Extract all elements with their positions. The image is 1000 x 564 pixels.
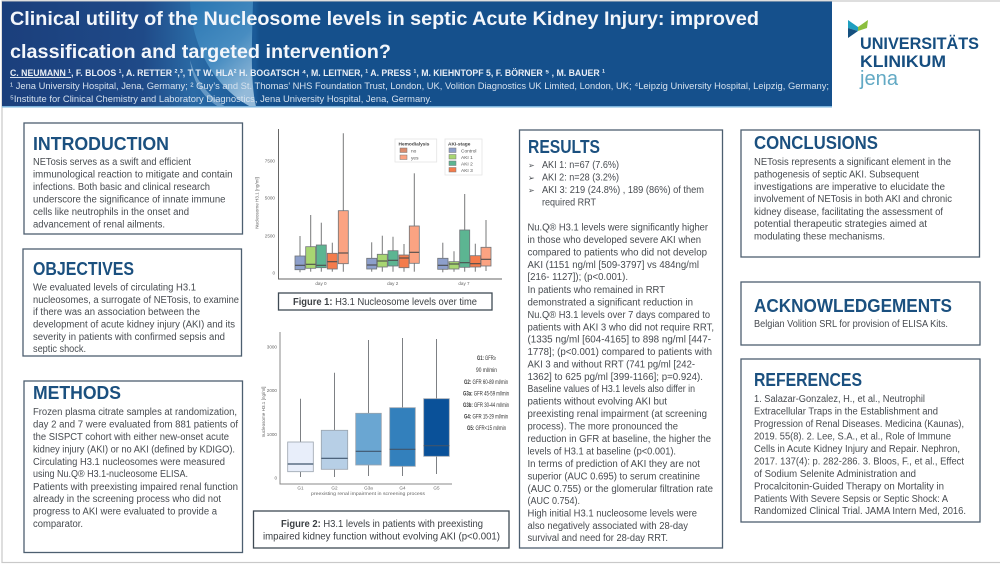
text: conclusions body: investigations are imperative to elucidate the (754, 182, 945, 193)
authors: C. NEUMANN ¹, F. BLOOS ¹, A. RETTER ²,³, T T W. HLA² H. BOGATSCH ⁴, M. LEITNER, ¹ A. PRESS ¹, M. KIEHNTOPF 5, F. BÖRNER ⁵ , M. BAUER ¹ (10, 68, 605, 78)
list: AKI counts: required RRT (542, 198, 596, 208)
legend: AKI stage: AKI 2 (461, 162, 473, 168)
legend: hemodialysis: Hemodialysis (398, 142, 430, 148)
text: objectives body: septic shock. (33, 344, 86, 355)
chart: figure 2 box plot: G5 (433, 486, 440, 490)
logo: Universitätsklinikum Jena (848, 20, 979, 90)
chart: figure 2 box plot: G4 (399, 486, 406, 490)
text: introduction body: cells like neutrophils in the onset and (33, 207, 189, 218)
text: introduction body: underscore the significance of innate immune (33, 194, 226, 206)
legend: GFR stages: G4: GFR 15-29 ml/min (464, 414, 508, 420)
legend: AKI stage (445, 139, 482, 175)
legend: GFR stages: G3a: GFR 45-59 ml/min (463, 392, 509, 398)
chart: figure 2 box plot: 2000 (267, 388, 277, 393)
list: AKI counts: ➢ (528, 186, 535, 195)
chart: figure 2 box plot: nucleosome H3.1 [ng/ml] (261, 387, 266, 437)
text: reference list: Procalcitonin-Guided Therapy on Mortality in (754, 482, 944, 492)
panel: results (520, 130, 722, 548)
chart: figure 2 box plot: 3000 (267, 344, 277, 350)
heading: conclusions: CONCLUSIONS (754, 132, 878, 153)
title (10, 8, 759, 63)
chart: figure 2 box plot: G1 (297, 486, 304, 490)
affiliations: ⁵Institute for Clinical Chemistry and Laboratory Diagnostics, Jena University Hospital, Jena, Germany. (10, 94, 432, 105)
text: objectives body (33, 282, 239, 355)
chart: figure 1 box plot (254, 129, 502, 286)
text: results body: preexisting renal impairment (at screening (528, 409, 707, 420)
list: AKI counts: AKI 1: n=67 (7.6%) (542, 160, 619, 171)
text: results body: In patients who remained in RRT (528, 285, 665, 296)
text: methods body: Patients with preexisting impaired renal function (33, 482, 238, 493)
text: methods body: the SISPCT cohort with either new-onset acute (33, 432, 229, 443)
text: introduction body: advancement of renal ailments. (33, 220, 165, 230)
text: reference list: of Sodium Selenite Administration and (754, 469, 916, 480)
chart: figure 2 box plot (261, 332, 452, 496)
text: results body: (AUC 0.754). (528, 496, 580, 507)
affiliations: ¹ Jena University Hospital, Jena, Germany; ² Guy’s and St. Thomas’ NHS Foundation Trust, London, UK, Volition Diagnostics UK Limited, London, UK; ⁴Leipzig University Hospital, Leipzig, Germany; (10, 81, 829, 92)
text: methods body: day 2 and 7 were evaluated from 881 patients of (33, 420, 238, 430)
header banner (2, 2, 832, 108)
icon: logo mark (848, 20, 868, 38)
text: results body: [216- 1127]); (p<0.001). (528, 272, 628, 283)
text: reference list: 2019. 55(8). 2. Lee, S.A., et al., Role of Immune (754, 432, 951, 442)
text: conclusions body: NETosis represents a significant element in the (754, 157, 951, 168)
text: conclusions body: kidney disease, facilitating the assessment of (754, 207, 943, 218)
panel: references (741, 359, 980, 522)
text: results body: (1335 ng/ml [604-4165] to 898 ng/ml [447- (528, 335, 711, 346)
chart: figure 1 box plot: day 7 (458, 281, 470, 286)
title: classification and targeted intervention? (10, 41, 391, 63)
chart: figure 2 box plot: G2 (331, 486, 338, 490)
text: methods body: Frozen plasma citrate samples at randomization, (33, 407, 237, 418)
text: reference list: Extracellular Traps in the Establishment and (754, 406, 938, 418)
text: results body: (AUC 0.755) or the glomerular filtration rate (528, 484, 713, 495)
chart: figure 1 box plot: day 2 (387, 281, 399, 286)
panel: acknowledgements (741, 282, 980, 345)
legend: GFR stages: G1: GFR≥ (477, 356, 496, 362)
text: methods body: Circulating H3.1 nucleosomes were measured (33, 457, 225, 468)
chart: figure 2 box plot: G3a (364, 486, 373, 490)
text: conclusions body: pathogenesis of septic AKI. Subsequent (754, 170, 919, 180)
text: results body: in those who developed severe AKI when (528, 235, 701, 246)
text: results body: In terms of prediction of AKI they are not (528, 459, 700, 470)
text: objectives body: severity in patients with confirmed sepsis and (33, 332, 225, 343)
text: results body: compared to patients who did not develop (528, 248, 707, 258)
caption: figure 2 (254, 511, 509, 548)
legend: hemodialysis: yes (411, 156, 419, 162)
heading: results: RESULTS (528, 136, 600, 157)
chart: figure 1 box plot: 7500 (265, 158, 275, 164)
text: results body: also negatively associated with 28-day (528, 521, 688, 532)
list: AKI counts: ➢ (528, 161, 535, 170)
text: methods body: using Nu.Q® H3.1-nucleosome ELISA. (33, 469, 188, 480)
text: methods body: progress to AKI were evaluated to provide a (33, 506, 217, 518)
text: reference list: Patients With Severe Sepsis or Septic Shock: A (754, 494, 948, 505)
legend: AKI stage: AKI 3 (461, 168, 473, 174)
affiliations (10, 81, 829, 105)
legend: AKI stage: AKI 1 (461, 155, 473, 161)
text: results body: superior (AUC 0.695) to serum creatinine (528, 472, 700, 482)
text: objectives body: if there was an association between the (33, 307, 200, 318)
text: methods body: comparator. (33, 519, 83, 530)
text: results body: levels of H3.1 at baseline (p<0.001). (528, 446, 676, 458)
legend: AKI stage: Control (461, 148, 476, 154)
heading: methods: METHODS (33, 382, 121, 403)
logo: Universitätsklinikum Jena: KLINIKUM (860, 52, 946, 71)
text: results body: High initial H3.1 nucleosome levels were (528, 508, 697, 520)
logo: Universitätsklinikum Jena: jena (859, 68, 899, 90)
text: conclusions body: potential therapeutic strategies aimed at (754, 219, 927, 230)
list: AKI counts: ➢ (528, 174, 535, 182)
text: reference list: Randomized Clinical Trial. JAMA Intern Med, 2016. (754, 506, 966, 517)
text: reference list (754, 394, 966, 517)
text: results body: AKI (1151 ng/ml [509-3797] vs 484ng/ml (528, 260, 699, 271)
text: results body: reduction in GFR at baseline, the higher the (528, 434, 711, 445)
text: results body: demonstrated a significant reduction in (528, 298, 693, 308)
legend: hemodialysis: no (411, 150, 417, 154)
text: results body: patients without evolving AKI but (528, 396, 667, 408)
legend: GFR stages: G5: GFR<15 ml/min (467, 426, 506, 432)
caption: figure 2: Figure 2: H3.1 levels in patients with preexisting (281, 519, 483, 530)
text: results body: process). The more pronounced the (528, 422, 678, 432)
heading: acknowledgements: ACKNOWLEDGEMENTS (754, 295, 952, 316)
text: conclusions body (754, 157, 952, 242)
text: results body (528, 222, 714, 544)
legend: GFR stages: G3b: GFR 30-44 ml/min (463, 403, 509, 409)
heading: references: REFERENCES (754, 369, 862, 390)
caption: figure 2: impaired kidney function without evolving AKI (p<0.001) (263, 532, 500, 542)
text: objectives body: We evaluated levels of circulating H3.1 (33, 282, 196, 294)
text: results body: patients with AKI 3 who did not require RRT, (528, 322, 714, 334)
chart: figure 2 box plot: 0 (274, 476, 277, 480)
legend: GFR stages (463, 356, 509, 432)
chart: figure 2 box plot: preexisting renal impairment in screening process (311, 491, 426, 496)
text: introduction body: immunological reaction to mitigate and contain (33, 170, 232, 180)
text: results body: AKI 3 and without RRT (741 pg/ml [242- (528, 360, 695, 370)
panel: methods (24, 381, 242, 552)
heading: objectives: OBJECTIVES (33, 258, 134, 279)
heading: introduction: INTRODUCTION (33, 133, 169, 154)
chart: figure 1 box plot: 5000 (265, 196, 275, 200)
text: introduction body: NETosis serves as a swift and efficient (33, 157, 191, 168)
text: results body: survival and need for 28-day RRT. (528, 533, 668, 544)
caption: figure 1: Figure 1: H3.1 Nucleosome levels over time (293, 297, 477, 308)
text: results body: 1362] to 625 pg/ml [399-1166]; p=0.924). (528, 372, 703, 383)
text: results body: 1778]; (p<0.001) compared to patients with (528, 347, 712, 358)
text: reference list: Progression of Renal Diseases. Medicina (Kaunas), (754, 419, 964, 430)
logo: Universitätsklinikum Jena: UNIVERSITÄTS (860, 34, 979, 53)
list: AKI counts: AKI 3: 219 (24.8%) , 189 (86%) of them (542, 185, 704, 196)
list: AKI counts: AKI 2: n=28 (3.2%) (542, 172, 619, 184)
chart: figure 1 box plot: 0 (272, 270, 275, 276)
text: introduction body: infections. Both basic and clinical research (33, 182, 210, 193)
legend: hemodialysis (395, 139, 437, 162)
text: methods body (33, 407, 238, 530)
text: reference list: Cells in Acute Kidney Injury and Repair. Nephron, (754, 444, 960, 455)
panel: conclusions (741, 130, 980, 257)
legend: GFR stages: G2: GFR 60-89 ml/min (464, 380, 508, 386)
text: introduction body (33, 157, 232, 230)
chart: figure 1 box plot: Nucleosome H3.1 [ng/ml] (254, 177, 260, 229)
text: objectives body: development of acute kidney injury (AKI) and its (33, 320, 235, 330)
text: results body: Nu.Q® H3.1 levels were significantly higher (528, 222, 709, 234)
chart: figure 1 box plot: 2500 (265, 234, 275, 238)
panel: objectives (23, 249, 242, 356)
text: reference list: 2017. 137(4): p. 282-286. 3. Bloos, F., et al., Effect (754, 456, 964, 468)
legend: GFR stages: 90 ml/min (476, 368, 497, 374)
list: AKI counts (528, 160, 704, 208)
text: results body: Baseline values of H3.1 levels also differ in (528, 384, 695, 395)
chart: figure 1 box plot: day 0 (315, 281, 327, 286)
legend: AKI stage: AKI-stage (448, 142, 471, 148)
text: methods body: kidney injury (AKI) or no AKI (defined by KDIGO). (33, 444, 235, 456)
title: Clinical utility of the Nucleosome levels in septic Acute Kidney Injury: improved (10, 8, 759, 30)
text: conclusions body: involvement of NETosis in both AKI and chronic (754, 194, 952, 205)
text: objectives body: nucleosomes, a surrogate of NETosis, to examine (33, 295, 239, 306)
text: methods body: already in the screening process who did not (33, 494, 221, 505)
text: acknowledgements body: Belgian Volition SRL for provision of ELISA Kits. (754, 319, 948, 330)
text: results body: Nu.Q® H3.1 levels over 7 days compared to (528, 310, 710, 321)
text: reference list: 1. Salazar-Gonzalez, H., et al., Neutrophil (754, 394, 925, 405)
text: conclusions body: modulating these mechanisms. (754, 232, 885, 242)
caption: figure 1 (278, 293, 492, 310)
chart: figure 2 box plot: 1000 (267, 432, 277, 437)
panel: introduction (24, 123, 242, 234)
